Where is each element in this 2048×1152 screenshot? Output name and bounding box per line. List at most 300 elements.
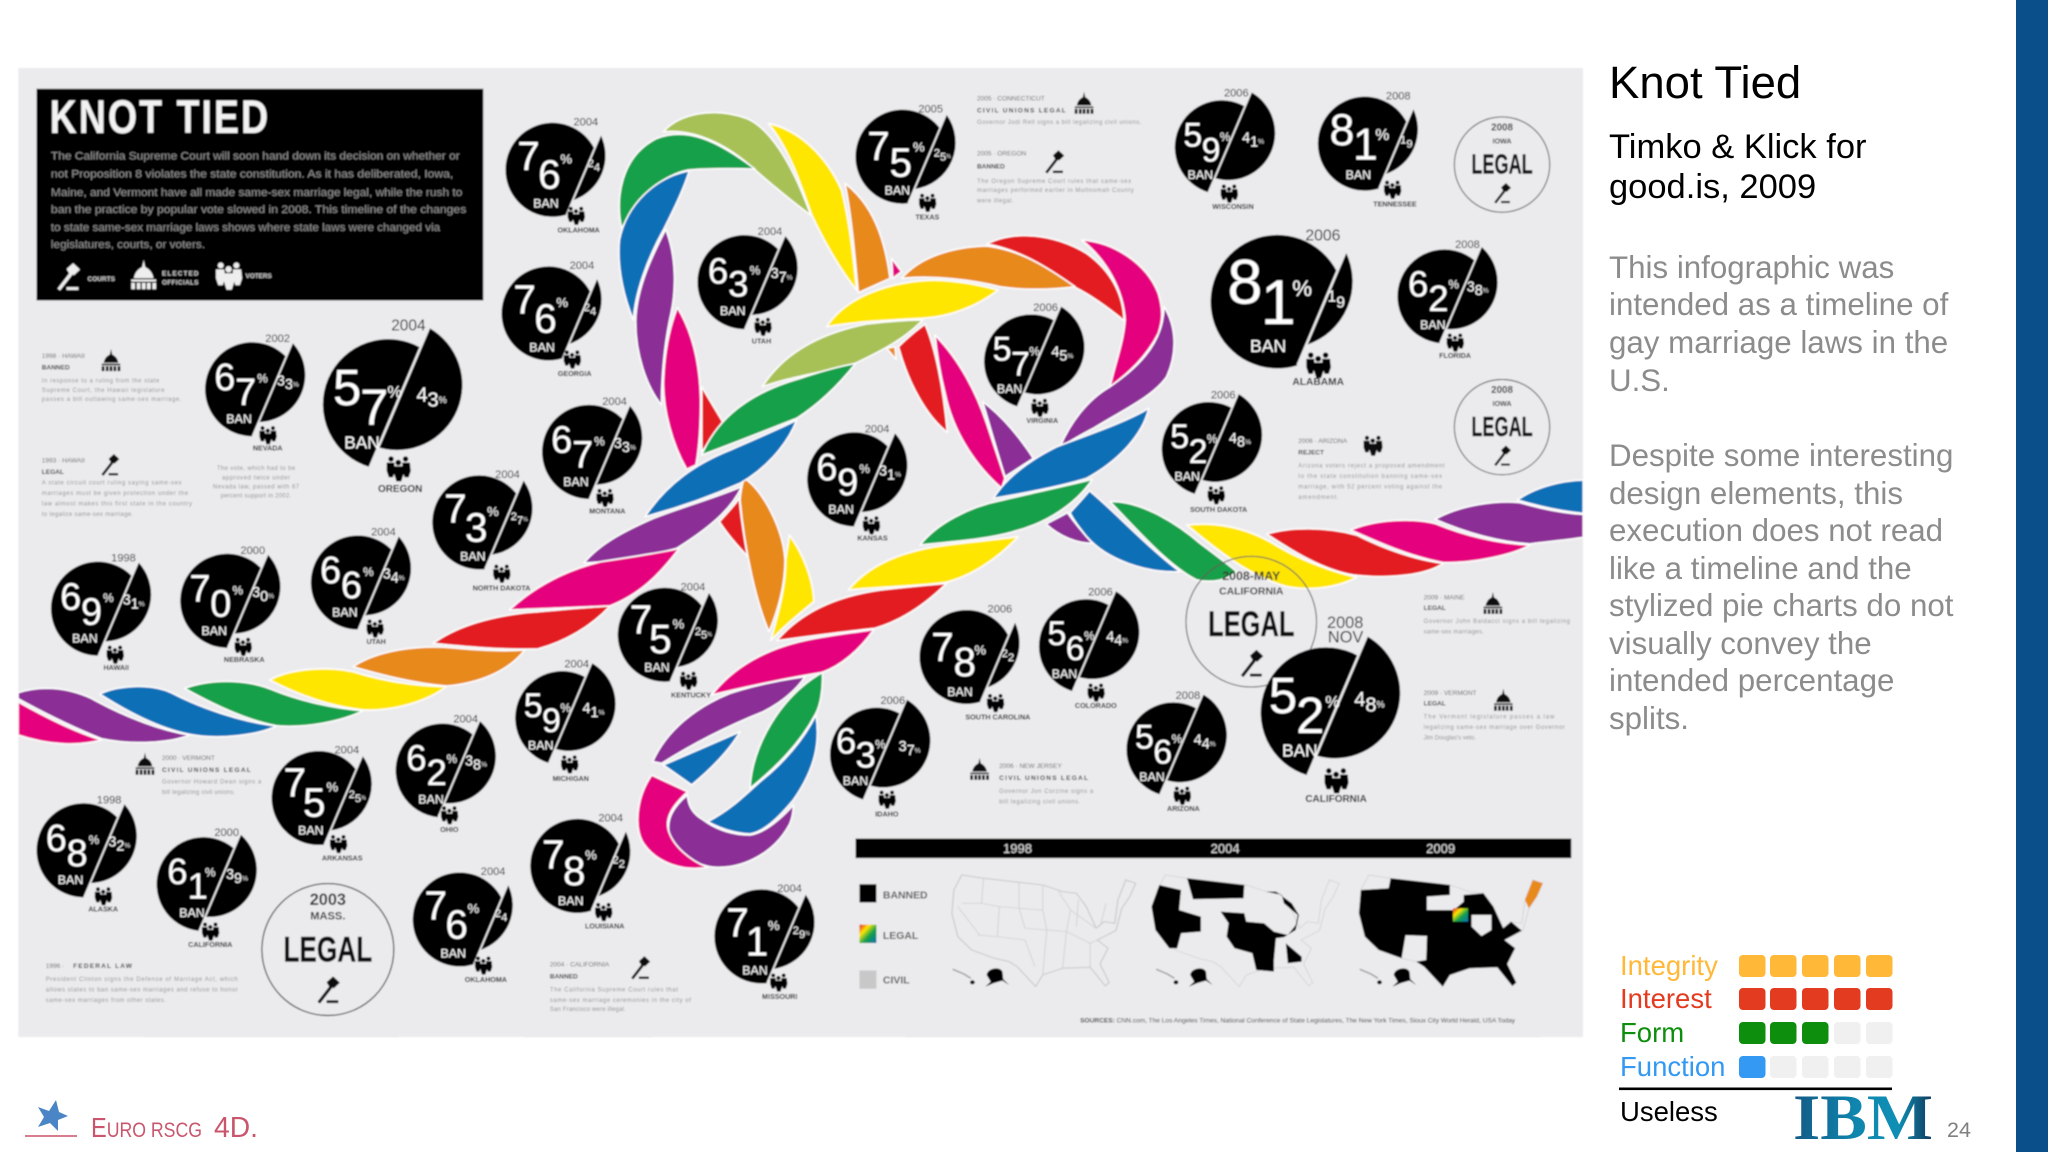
pie: Colorado 56: 5	[1048, 615, 1066, 653]
caption: 2009 Maine legal	[1424, 592, 1570, 635]
pie: Nebraska 70: %	[268, 593, 274, 600]
pie: Missouri 71: 9	[799, 929, 805, 941]
pie: Alabama 81 (large): 1	[1261, 268, 1296, 338]
pie: South Carolina 78: 2006	[988, 604, 1012, 616]
key: courts, elected officials, voters: OFFICIALS	[162, 280, 199, 287]
caption: 2004 California banned: The California Supreme Court rules that	[550, 987, 678, 993]
pie: Louisiana 78: 8	[563, 848, 585, 894]
pie: Wisconsin 59	[1175, 88, 1275, 211]
pie: Oregon 57 (large): BAN	[344, 432, 380, 452]
pie: Alabama 81 (large): 8	[1227, 248, 1262, 318]
caption: 1996 federal law	[46, 963, 238, 1004]
pie: Missouri 71: 7	[726, 899, 749, 945]
commentary text: splits.	[1609, 701, 1689, 736]
pie: Arkansas 75: 2004	[334, 745, 359, 757]
pie: California 61: 3	[226, 867, 234, 883]
caption: 2009 Maine legal: same-sex marriages.	[1424, 629, 1484, 635]
logo: IBM: IBM	[1793, 1082, 1933, 1152]
pie: Colorado 56: 6	[1066, 630, 1085, 668]
map: 1998	[952, 875, 1136, 987]
pie: Idaho 63: 3	[856, 734, 876, 775]
pie: Ohio 62: %	[481, 762, 487, 769]
pie: Colorado 56	[1039, 587, 1139, 710]
commentary text: intended percentage	[1609, 663, 1894, 698]
pie: Louisiana 78: 2004	[598, 813, 623, 825]
commentary text: stylized pie charts do not	[1609, 588, 1954, 623]
pie: Oregon 57 (large): OREGON	[378, 484, 422, 495]
pie: South Dakota 52: 2006	[1211, 389, 1236, 401]
pie: Michigan 59: 5	[524, 687, 543, 725]
caption: 2004 California banned: same-sex marriage ceremonies in the city of	[550, 998, 691, 1004]
legal badge: Massachusetts 2003	[262, 884, 394, 1016]
pie: Florida 62: 2	[1428, 278, 1449, 319]
map: 2009	[1359, 875, 1543, 987]
pie: Hawaii 69: HAWAII	[103, 664, 129, 672]
commentary text: design elements, this	[1609, 476, 1903, 511]
caption: 1993 Hawaii legal: LEGAL	[42, 469, 64, 476]
timeline bar: 1998, 2004, 2009: 1998	[1003, 841, 1032, 856]
pie: South Dakota 52: SOUTH DAKOTA	[1190, 506, 1247, 514]
caption: 2004 California banned: 2004 · CALIFORNIA	[550, 962, 610, 969]
pie: Ohio 62: 2004	[453, 713, 478, 725]
pie: Virginia 57: 5	[993, 330, 1012, 368]
pie: Kentucky 75: KENTUCKY	[671, 691, 711, 699]
pie: Kansas 69: %	[859, 463, 870, 476]
pie: California Nov 2008 52 (large): 2	[1296, 687, 1324, 744]
timeline bar: 1998, 2004, 2009: 2004	[1211, 841, 1240, 856]
page number: 24	[1947, 1118, 1971, 1142]
commentary text: This infographic was	[1609, 250, 1894, 285]
caption: New Jersey civil unions	[970, 758, 1094, 805]
heading: KNOT TIED: KNOT TIED	[50, 91, 270, 144]
pie: California Nov 2008 52 (large): NOV	[1328, 628, 1363, 646]
caption: New Jersey civil unions: CIVIL UNIONS LEGAL	[999, 775, 1088, 782]
pie: Texas 75	[855, 103, 956, 221]
pie: Wisconsin 59: WISCONSIN	[1212, 203, 1254, 211]
caption: 1998 Hawaii banned	[42, 349, 182, 403]
intro paragraph: The California Supreme Court will soon hand down its decision on whether or	[51, 150, 460, 162]
pie: Louisiana 78	[530, 813, 630, 931]
rating: interest: Interest	[1620, 983, 1712, 1014]
key: courts, elected officials, voters: ELECTED	[162, 271, 199, 278]
pie: Utah 66: %	[363, 566, 374, 579]
caption: 2000 Connecticut civil unions: 2005 · CONNECTICUT	[977, 96, 1045, 103]
caption: New Jersey civil unions: 2006 · NEW JERSEY	[999, 763, 1062, 770]
caption: 2009 Vermont legal: 2009 · VERMONT	[1424, 690, 1477, 697]
pie: Virginia 57: 7	[1011, 346, 1030, 384]
pie: Oklahoma 76 lower: 2004	[481, 866, 505, 878]
pie: Nebraska 70: NEBRASKA	[224, 656, 265, 664]
caption: 2000 Connecticut civil unions	[977, 92, 1142, 126]
pie: Kentucky 75: 7	[630, 596, 652, 642]
pie: Utah 66: 2004	[371, 527, 396, 539]
pie: Arizona 56: ARIZONA	[1167, 805, 1200, 813]
pie: Hawaii 69: BAN	[72, 632, 98, 646]
pie: North Dakota 73: 2004	[495, 469, 520, 481]
pie: Oregon 57 (large): 2004	[391, 317, 426, 334]
pie: Oklahoma 76 lower: 2	[495, 908, 501, 920]
pie: Texas 75: %	[946, 154, 951, 160]
pie: Nevada 67: 7	[235, 372, 256, 414]
pie: Utah 63: %	[787, 275, 793, 282]
pie: Oklahoma 76: OKLAHOMA	[557, 226, 600, 234]
logo: Euro RSCG 4D	[25, 1100, 258, 1144]
legal badge: Iowa civil 2008: LEGAL	[1471, 411, 1533, 442]
pie: Georgia 76: %	[556, 295, 568, 310]
caption: Nevada note: The vote, which had to be	[217, 466, 296, 472]
pie: Alaska 68: 2	[116, 838, 124, 854]
pie: South Carolina 78: 2	[1008, 652, 1014, 664]
pie: California 61: 6	[167, 851, 188, 892]
pie: Oregon 57 (large)	[323, 317, 462, 495]
verdict: Useless: Useless	[1620, 1096, 1718, 1127]
pie: Idaho 63	[830, 695, 930, 818]
caption: Nevada note: Nevada law, passed with 67	[213, 484, 300, 490]
caption: 2006 Arizona reject: marriage, with 52 percent voting against the	[1298, 484, 1443, 490]
pie: Kentucky 75: BAN	[644, 660, 670, 674]
logo: Euro RSCG 4D: EURO RSCG	[91, 1112, 202, 1143]
pie: North Dakota 73: 2	[511, 511, 517, 523]
pie: Wisconsin 59: 2006	[1224, 88, 1249, 100]
legal badge: California May 2008	[1186, 556, 1317, 687]
pie: Utah 63: 3	[728, 263, 749, 304]
commentary text: intended as a timeline of	[1609, 287, 1949, 322]
pie: Michigan 59: BAN	[528, 739, 553, 753]
pie: Tennessee 81: 1	[1400, 135, 1406, 147]
pie: Hawaii 69: 9	[81, 591, 102, 633]
pie: Texas 75: TEXAS	[915, 213, 940, 221]
pie: Michigan 59: MICHIGAN	[553, 775, 589, 783]
caption: 2006 Oregon banned: marriages performed earlier in Multnomah County	[977, 188, 1134, 194]
heading: Knot Tied: Knot Tied	[1609, 57, 1801, 108]
pie: Nebraska 70: 7	[189, 568, 210, 610]
rating: function	[1620, 1051, 1892, 1082]
pie: Alaska 68: ALASKA	[88, 906, 118, 914]
pie: Georgia 76	[502, 260, 602, 378]
pie: Georgia 76: GEORGIA	[558, 370, 592, 378]
pie: Oklahoma 76 lower: OKLAHOMA	[465, 976, 507, 984]
pie: Ohio 62: 6	[406, 738, 427, 779]
legal badge: Iowa civil 2008	[1454, 379, 1550, 475]
caption: 2006 Arizona reject: Arizona voters reject a proposed amendment	[1298, 464, 1445, 470]
caption: 2009 Vermont legal: legalizing same-sex marriage over Governor	[1424, 725, 1565, 731]
pie: California Nov 2008 52 (large): %	[1376, 700, 1385, 710]
pie: Arkansas 75: %	[361, 795, 366, 801]
caption: 2006 Arizona reject	[1298, 436, 1445, 501]
pie: Florida 62: %	[1483, 288, 1489, 295]
pie: Montana 67: 6	[551, 420, 572, 462]
pie: California Nov 2008 52 (large): 5	[1269, 667, 1297, 724]
caption: 2006 Arizona reject: REJECT	[1298, 450, 1324, 457]
caption: 1993 Hawaii legal: law almost makes this first state in the country	[42, 501, 192, 507]
commentary text	[1609, 250, 1954, 736]
pie: Florida 62: %	[1448, 279, 1459, 292]
pie: Kentucky 75: 2	[695, 626, 701, 638]
pie: Missouri 71: MISSOURI	[762, 993, 797, 1001]
pie: South Dakota 52: 8	[1237, 435, 1245, 451]
pie: Alabama 81 (large): BAN	[1250, 336, 1286, 356]
pie: Utah 66: 3	[383, 567, 391, 583]
pie: Colorado 56: %	[1122, 638, 1128, 645]
pie: Texas 75: 5	[889, 139, 912, 185]
pie: Oregon 57 (large): 4	[416, 384, 428, 406]
pie: Tennessee 81	[1318, 90, 1418, 208]
pie: California 61: BAN	[179, 906, 205, 920]
pie: Idaho 63: %	[875, 738, 886, 751]
caption: 1996 federal law: allows states to ban same-sex marriages and refuse to honor	[46, 987, 238, 993]
pie: Kansas 69: 9	[837, 462, 858, 504]
pie: Kentucky 75	[618, 581, 718, 699]
pie: Oklahoma 76 lower: %	[468, 901, 480, 916]
caption: 2006 Oregon banned: The Oregon Supreme Court rules that same-sex	[977, 179, 1131, 185]
pie: Florida 62: FLORIDA	[1439, 352, 1471, 360]
pie: Alabama 81 (large): 9	[1336, 294, 1345, 311]
pie: Alaska 68: 1998	[97, 794, 121, 806]
intro paragraph: legislatures, courts, or voters.	[51, 239, 205, 251]
pie: Idaho 63: 7	[907, 743, 915, 759]
pie: Hawaii 69: 6	[60, 576, 81, 618]
pie: Hawaii 69: %	[139, 601, 145, 608]
pie: Montana 67: %	[594, 435, 605, 448]
pie: California Nov 2008 52 (large): BAN	[1282, 741, 1318, 761]
pie: Utah 66: 6	[320, 550, 341, 592]
US maps	[952, 875, 1543, 987]
pie: South Carolina 78: 2	[1002, 648, 1008, 660]
pie: North Dakota 73: %	[523, 517, 528, 523]
pie: Kentucky 75: 5	[649, 616, 672, 662]
pie: Utah 63: 7	[779, 270, 787, 286]
pie: Georgia 76: BAN	[529, 340, 555, 354]
pie: Alabama 81 (large): ALABAMA	[1292, 377, 1345, 388]
pie: California 61: CALIFORNIA	[188, 941, 232, 949]
pie: Michigan 59: 4	[583, 701, 591, 717]
pie: Texas 75: BAN	[885, 184, 910, 198]
caption: 1998 Hawaii banned: In response to a ruling from the state	[42, 379, 160, 385]
pie: Texas 75: 2005	[918, 103, 943, 115]
pie: Georgia 76: 6	[534, 295, 557, 341]
pie: California Nov 2008 52 (large): CALIFORNIA	[1305, 794, 1367, 805]
timeline bar: 1998, 2004, 2009: 2009	[1426, 841, 1455, 856]
caption: 2006 Arizona reject: 2006 · ARIZONA	[1298, 438, 1348, 445]
pie: Arkansas 75: 5	[355, 793, 361, 805]
pie: Montana 67: 7	[572, 435, 593, 477]
pie: Idaho 63: 3	[899, 739, 907, 755]
pie: Colorado 56: BAN	[1052, 667, 1077, 681]
pie: Idaho 63: %	[915, 747, 921, 754]
commentary text: like a timeline and the	[1609, 551, 1912, 586]
key: courts, elected officials, voters: VOTERS	[246, 273, 272, 280]
pie: Alaska 68: %	[124, 843, 130, 850]
pie: Tennessee 81: 1	[1353, 120, 1378, 169]
pie: South Carolina 78: SOUTH CAROLINA	[965, 714, 1030, 722]
title block	[37, 89, 483, 300]
subheading: author credit	[1609, 128, 1867, 206]
pie: Alaska 68: 8	[67, 833, 88, 875]
pie: Arkansas 75: ARKANSAS	[322, 855, 363, 863]
key: courts, elected officials, voters	[57, 260, 272, 290]
pie: Nebraska 70: 3	[252, 585, 260, 601]
caption: 2009 Vermont legal: The Vermont legislature passes a law	[1424, 714, 1555, 720]
caption: 2000 Vermont civil unions	[136, 753, 262, 796]
pie: South Dakota 52: %	[1245, 439, 1251, 446]
pie: Nebraska 70	[180, 545, 280, 664]
pie: Nevada 67: 3	[277, 373, 285, 389]
pie: Ohio 62: OHIO	[440, 826, 459, 834]
pie: Montana 67: MONTANA	[589, 507, 625, 515]
pie: Ohio 62: %	[447, 753, 458, 766]
pie: North Dakota 73: %	[487, 504, 499, 519]
sidebar accent bar	[2016, 0, 2048, 1152]
pie: Ohio 62: 8	[473, 757, 481, 773]
pie: Virginia 57: %	[1067, 353, 1073, 360]
pie: Louisiana 78: 2	[619, 858, 625, 870]
pie: Utah 66: %	[399, 575, 405, 582]
pie: Louisiana 78: 7	[542, 832, 565, 878]
caption: 2000 Connecticut civil unions: Governor Jodi Rell signs a bill legalizing civil unions.	[977, 120, 1142, 126]
pie: South Dakota 52: BAN	[1175, 470, 1200, 484]
legal badge: Massachusetts 2003: MASS.	[310, 911, 345, 923]
pie: Georgia 76: 4	[590, 306, 596, 318]
pie: South Dakota 52: 2	[1189, 433, 1207, 471]
pie: Florida 62	[1397, 239, 1498, 360]
pie: Utah 63: %	[750, 264, 761, 277]
commentary text: U.S.	[1609, 363, 1670, 398]
pie: Idaho 63: 2006	[880, 695, 905, 707]
pie: Arizona 56: 6	[1153, 733, 1172, 771]
caption: 2009 Vermont legal: LEGAL	[1424, 700, 1446, 707]
pie: Kentucky 75: 2004	[681, 581, 705, 593]
pie: Hawaii 69: 1	[131, 597, 139, 613]
commentary text: Despite some interesting	[1609, 438, 1953, 473]
pie: South Dakota 52: 5	[1170, 418, 1189, 456]
caption: 1993 Hawaii legal: marriages must be given protection under the	[42, 491, 189, 497]
pie: Alabama 81 (large): 1	[1327, 289, 1336, 306]
pie: Georgia 76: 2004	[570, 260, 594, 272]
caption: 2009 Vermont legal: Jim Douglas's veto.	[1424, 735, 1476, 741]
pie: North Dakota 73: 7	[444, 485, 467, 531]
pie: Montana 67: BAN	[563, 475, 589, 489]
pie: Arkansas 75: BAN	[298, 824, 324, 838]
pie: Tennessee 81: BAN	[1346, 168, 1371, 182]
pie: North Dakota 73: BAN	[460, 549, 486, 563]
pie: Utah 66: UTAH	[366, 638, 386, 646]
pie: Kansas 69: KANSAS	[857, 535, 888, 543]
caption: 2004 California banned: BANNED	[550, 973, 578, 980]
rating: form	[1620, 1017, 1892, 1048]
caption: 2009 Maine legal: Governor John Baldacci signs a bill legalizing	[1424, 619, 1570, 625]
pie: Wisconsin 59: 4	[1242, 130, 1250, 146]
legal badge: Iowa 2008	[1454, 117, 1550, 212]
pie: Nevada 67: 6	[214, 357, 235, 399]
legend: banned: BANNED	[883, 891, 928, 902]
timeline bar: 1998, 2004, 2009	[856, 839, 1571, 858]
pie: Louisiana 78: 2	[613, 854, 619, 866]
pie: Nevada 67: BAN	[226, 412, 252, 426]
pie: Oregon 57 (large): %	[387, 384, 402, 402]
pie: Arizona 56: 4	[1202, 736, 1210, 752]
pie: Kansas 69: 6	[816, 447, 837, 489]
pie: Virginia 57: 2006	[1033, 302, 1058, 314]
caption: 1993 Hawaii legal: 1993 · HAWAII	[42, 457, 85, 464]
pie: Ohio 62	[396, 713, 496, 834]
pie: Texas 75: 2	[934, 148, 940, 160]
pie: Kansas 69: %	[895, 472, 901, 479]
caption: Nevada note: approved twice under	[222, 475, 290, 481]
caption: 2004 California banned: San Francisco were illegal.	[550, 1007, 626, 1013]
pie: Kentucky 75: %	[707, 632, 712, 638]
legal badge: Massachusetts 2003: 2003	[310, 891, 346, 909]
pie: Nevada 67: 3	[285, 377, 293, 393]
pie: Arkansas 75: 5	[303, 779, 326, 825]
pie: Utah 63: 2004	[758, 226, 782, 238]
legend: legal: LEGAL	[883, 931, 919, 942]
pie: Missouri 71: %	[805, 931, 810, 937]
pie: Utah 63: BAN	[720, 304, 745, 318]
pie: Louisiana 78: %	[585, 847, 597, 862]
pie: California 61: 1	[187, 866, 208, 907]
caption: 2000 Vermont civil unions: 2000 · VERMONT	[162, 755, 215, 762]
pie: Michigan 59: %	[560, 702, 571, 715]
pie: Idaho 63: BAN	[843, 774, 868, 788]
pie: Hawaii 69: %	[103, 592, 114, 605]
caption: 2000 Vermont civil unions: CIVIL UNIONS LEGAL	[162, 767, 251, 774]
pie: Colorado 56: 4	[1106, 629, 1114, 645]
pie: Louisiana 78: LOUISIANA	[585, 923, 624, 931]
caption: 1998 Hawaii banned: 1998 · HAWAII	[42, 353, 85, 360]
pie: Wisconsin 59: %	[1220, 131, 1231, 144]
pie: Kentucky 75: %	[673, 616, 685, 631]
pie: Utah 66: 4	[391, 571, 399, 587]
legal badge: California May 2008: CALIFORNIA	[1219, 586, 1284, 597]
pie: Montana 67	[542, 396, 642, 515]
pie: Kentucky 75: 5	[701, 630, 707, 642]
pie: Oregon 57 (large): %	[439, 395, 447, 405]
pie: California Nov 2008 52 (large): 8	[1365, 694, 1376, 716]
rating: interest	[1620, 983, 1892, 1014]
pie: Missouri 71	[714, 883, 815, 1001]
pie: Missouri 71: 1	[746, 918, 768, 964]
pie: Utah 66: 6	[341, 565, 362, 607]
legend: civil: CIVIL	[883, 976, 910, 987]
pie: North Dakota 73: 3	[465, 504, 487, 550]
caption: 2009 Maine legal: LEGAL	[1424, 605, 1446, 612]
pie: Georgia 76: 7	[513, 276, 536, 322]
pie: Nebraska 70: 0	[260, 589, 268, 605]
pie: North Dakota 73: 7	[517, 515, 523, 527]
pie: Arkansas 75: 2	[349, 789, 355, 801]
caption: 2000 Vermont civil unions: bill legalizing civil unions.	[162, 790, 235, 796]
caption: 1996 federal law: President Clinton signs the Defense of Marriage Act, which	[46, 977, 238, 983]
map legend	[859, 884, 928, 989]
pie: Kansas 69: 2004	[865, 423, 889, 435]
map: 2004	[1151, 875, 1339, 987]
pie: Michigan 59: %	[599, 709, 605, 716]
caption: 2004 California banned	[550, 956, 691, 1013]
pie: Nebraska 70: 2000	[240, 545, 265, 557]
caption: 2000 Connecticut civil unions: CIVIL UNIONS LEGAL	[977, 107, 1066, 114]
caption: 1998 Hawaii banned: passes a bill outlawing same-sex marriage.	[42, 397, 182, 403]
pie: Utah 63: UTAH	[752, 338, 771, 346]
pie: Utah 66	[311, 527, 411, 646]
pie: Alabama 81 (large): %	[1292, 276, 1312, 301]
commentary text: gay marriage laws in the	[1609, 325, 1948, 360]
pie: Alaska 68	[37, 794, 137, 914]
subheading: author credit: good.is, 2009	[1609, 168, 1816, 206]
pie: Florida 62: 8	[1475, 283, 1483, 299]
pie: Wisconsin 59: 9	[1202, 131, 1221, 169]
intro paragraph: not Proposition 8 violates the state constitution. As it has deliberated, Iowa,	[51, 169, 453, 181]
intro paragraph: Maine, and Vermont have all made same-sex marriage legal, while the rush to	[51, 187, 462, 199]
